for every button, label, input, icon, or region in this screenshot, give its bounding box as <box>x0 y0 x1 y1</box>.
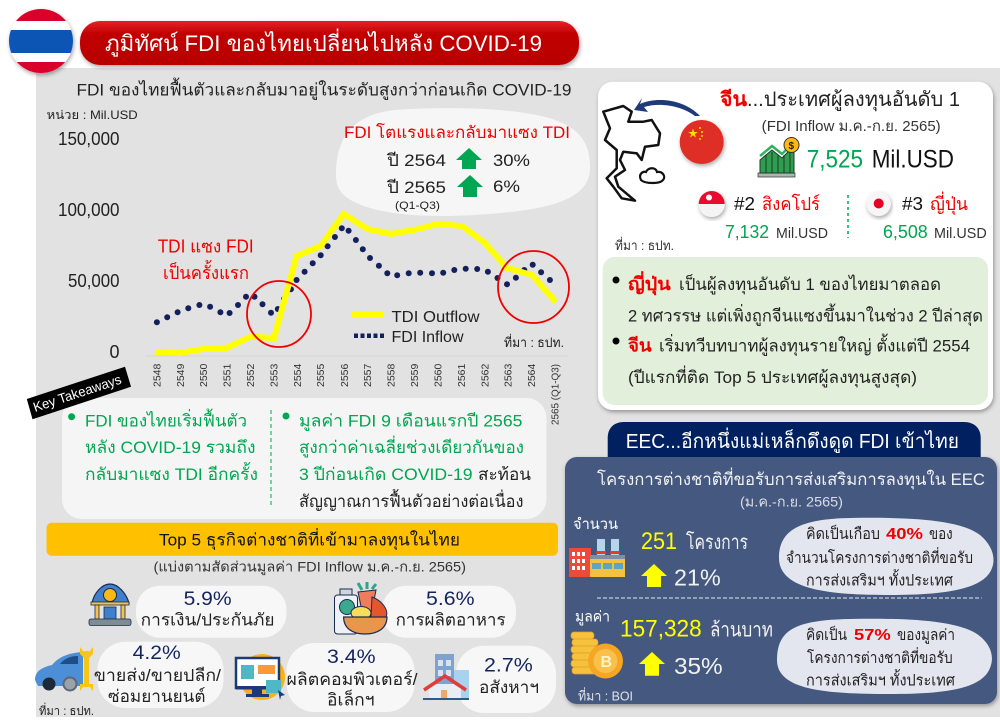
panel: key takeaways: สัญญาณการฟื้นตัวอย่างต่อเนื่อง <box>299 489 524 511</box>
icon: China flag <box>680 120 724 164</box>
panel: EEC projects <box>565 457 997 704</box>
panel: China top investor: จีน <box>720 88 747 111</box>
line chart: TDI outflow and FDI inflow: 2564 <box>526 363 538 387</box>
callout: TDI overtakes FDI: เป็นครั้งแรก <box>163 260 249 283</box>
text block: Japan and China notes: ญี่ปุ่น <box>628 271 671 296</box>
icon: food <box>334 582 387 634</box>
callout: share of value: การส่งเสริมฯ ทั้งประเทศ <box>806 669 955 690</box>
arrow: value up <box>639 652 665 676</box>
subheading: top 5 businesses: (แบ่งตามสัดส่วนมูลค่า FDI Inflow ม.ค.-ก.ย. 2565) <box>154 559 466 576</box>
panel: EEC projects: ล้านบาท <box>710 620 773 642</box>
panel: China top investor: Mil.USD <box>776 225 828 242</box>
card: real estate share <box>456 646 556 713</box>
arrow: China to Thailand <box>634 98 700 116</box>
icon: car and wrench <box>35 647 93 691</box>
panel: China top investor: 7,132 <box>725 222 769 242</box>
line chart: TDI outflow and FDI inflow: 2549 <box>175 363 187 387</box>
panel: key takeaways: FDI ของไทยเริ่มฟื้นตัว <box>85 409 247 431</box>
icon: real estate <box>423 654 469 700</box>
panel: China top investor: ...ประเทศผู้ลงทุนอันดับ 1 <box>747 89 960 112</box>
line chart: TDI outflow and FDI inflow: หน่วย : Mil.USD <box>47 108 138 122</box>
panel: key takeaways: กลับมาแซง TDI อีกครั้ง <box>85 462 258 484</box>
line chart: TDI outflow and FDI inflow: 2554 <box>292 363 304 387</box>
card: real estate share: อสังหาฯ <box>479 678 539 697</box>
callout: TDI overtakes FDI <box>158 237 254 283</box>
panel: EEC projects: โครงการต่างชาติที่ขอรับการส่งเสริมการลงทุนใน EEC <box>597 467 985 490</box>
text block: Japan and China notes: 2 ทศวรรษ แต่เพิ่งถูกจีนแซงขึ้นมาในช่วง 2 ปีล่าสุด <box>628 304 983 327</box>
callout: share of value: โครงการต่างชาติที่ขอรับ <box>807 647 953 667</box>
callout: FDI growth: 6% <box>493 177 520 196</box>
chart legend <box>351 309 480 346</box>
panel: EEC projects: 157,328 <box>620 616 702 643</box>
arrow: projects up <box>641 564 667 587</box>
card: retail and auto repair share <box>94 642 224 708</box>
icon: bank <box>89 584 131 626</box>
icon: China flag: ★ <box>688 129 698 140</box>
icon: computer <box>236 654 285 700</box>
line chart: TDI outflow and FDI inflow: 2561 <box>456 363 468 387</box>
panel: key takeaways: 3 ปีก่อนเกิด COVID-19 <box>299 465 473 484</box>
line chart: TDI outflow and FDI inflow: 0 <box>109 342 120 362</box>
line chart: TDI outflow and FDI inflow: 2565 (Q1-Q3) <box>550 364 562 425</box>
line chart: TDI outflow and FDI inflow: 2558 <box>386 363 398 387</box>
heading: top 5 businesses <box>46 523 558 556</box>
card: finance share: 5.9% <box>184 589 232 610</box>
panel: key takeaways: หลัง COVID-19 รวมถึง <box>85 438 256 457</box>
card: finance share <box>136 586 286 638</box>
panel: key takeaways: มูลค่า FDI 9 เดือนแรกปี 2565 <box>299 412 522 432</box>
panel: China top investor: ญี่ปุ่น <box>930 191 968 215</box>
panel: EEC projects: 21% <box>674 565 721 591</box>
line chart: TDI outflow and FDI inflow: 150,000 <box>58 129 120 149</box>
panel: key takeaways: สูงกว่าค่าเฉลี่ยช่วงเดียวกันของ <box>299 435 524 458</box>
heading tab: EEC: EEC...อีกหนึ่งแม่เหล็กดึงดูด FDI เข้าไทย <box>626 427 959 454</box>
card: food production share: 5.6% <box>426 589 475 610</box>
line chart: TDI outflow and FDI inflow: 2555 <box>315 363 327 387</box>
card: computer and electronics share: ผลิตคอมพิวเตอร์/ <box>286 670 418 689</box>
panel: China top investor: #3 <box>902 194 923 214</box>
icon: Singapore flag <box>698 191 725 217</box>
callout: share of projects: ของ <box>929 526 953 543</box>
callout: share of value: คิดเป็น <box>806 625 847 644</box>
card: finance share: การเงิน/ประกันภัย <box>141 611 274 630</box>
title: ภูมิทัศน์ FDI ของไทยเปลี่ยนไปหลัง COVID-19 <box>105 28 542 57</box>
line chart: TDI outflow and FDI inflow: 2553 <box>268 363 280 387</box>
panel: EEC projects: จำนวน <box>573 516 618 533</box>
panel: EEC projects: 251 <box>641 528 677 555</box>
card: food production share <box>382 586 516 638</box>
panel: EEC projects: (ม.ค.-ก.ย. 2565) <box>740 494 843 510</box>
callout: share of value: 57% <box>854 627 891 644</box>
source note: top 5: ที่มา : ธปท. <box>39 702 94 718</box>
icon: Japan flag <box>867 192 891 216</box>
card: real estate share: 2.7% <box>484 656 533 677</box>
icon: Thailand map <box>603 106 664 201</box>
icon: factory <box>569 539 625 577</box>
heading: top 5 businesses: Top 5 ธุรกิจต่างชาติที่เข้ามาลงทุนในไทย <box>159 528 460 551</box>
panel: China top investor: 6,508 <box>883 222 928 242</box>
callout: FDI growth: 30% <box>493 151 530 170</box>
text block: Japan and China notes: เริ่มทวีบทบาทผู้ลงทุนรายใหญ่ ตั้งแต่ปี 2554 <box>659 334 970 357</box>
line chart: TDI outflow and FDI inflow: 2552 <box>245 363 257 387</box>
line chart: TDI outflow and FDI inflow: 50,000 <box>68 271 120 291</box>
chart heading: FDI ของไทยฟื้นตัวและกลับมาอยู่ในระดับสูงกว่าก่อนเกิด COVID-19 <box>76 78 572 100</box>
icon: coins <box>571 632 623 678</box>
card: computer and electronics share: 3.4% <box>327 647 376 668</box>
line chart: TDI outflow and FDI inflow: 2551 <box>222 363 234 387</box>
line chart: TDI outflow and FDI inflow: 2556 <box>339 363 351 387</box>
panel: EEC projects: มูลค่า <box>575 609 610 626</box>
panel: China top investor: 7,525 <box>807 145 863 173</box>
callout: share of projects <box>779 518 994 595</box>
line chart: TDI outflow and FDI inflow: 2559 <box>409 363 421 387</box>
callout: FDI growth: FDI โตแรงและกลับมาแซง TDI <box>344 123 570 142</box>
callout: share of projects: คิดเป็นเกือบ <box>806 524 880 543</box>
panel: China top investor: Mil.USD <box>934 225 987 242</box>
callout: FDI growth <box>336 108 590 216</box>
chart legend: TDI Outflow <box>392 309 480 326</box>
text block: Japan and China notes <box>603 257 988 405</box>
line chart: TDI outflow and FDI inflow: 2557 <box>362 363 374 387</box>
panel: China top investor: สิงคโปร์ <box>762 193 820 214</box>
card: food production share: การผลิตอาหาร <box>396 611 506 630</box>
panel: EEC projects: 35% <box>674 653 723 679</box>
card: computer and electronics share: อิเล็กฯ <box>327 689 374 710</box>
panel: China top investor: #2 <box>734 194 755 214</box>
panel: China top investor <box>598 82 993 410</box>
card: computer and electronics share <box>286 643 418 712</box>
panel: EEC projects: โครงการ <box>686 531 748 554</box>
chart legend: FDI Inflow <box>392 329 464 346</box>
source note: chart: ที่มา : ธปท. <box>504 334 564 350</box>
icon: growth chart <box>758 138 799 177</box>
icon: growth chart: $ <box>788 141 794 152</box>
card: retail and auto repair share: ซ่อมยานยนต์ <box>108 687 206 706</box>
callout: FDI growth: (Q1-Q3) <box>395 200 440 212</box>
text block: Japan and China notes: เป็นผู้ลงทุนอันดับ 1 ของไทยมาตลอด <box>679 273 941 295</box>
panel: EEC projects: ที่มา : BOI <box>578 688 633 704</box>
card: retail and auto repair share: 4.2% <box>133 643 181 664</box>
callout: share of projects: การส่งเสริมฯ ทั้งประเทศ <box>806 569 953 590</box>
icon: coins: B <box>600 654 612 671</box>
line chart: TDI outflow and FDI inflow: 2560 <box>432 363 444 387</box>
card: retail and auto repair share: ขายส่ง/ขายปลีก/ <box>94 666 221 685</box>
panel: China top investor: Mil.USD <box>872 145 954 173</box>
icon: Thai flag <box>9 9 73 74</box>
heading tab: EEC <box>608 422 981 460</box>
line chart: TDI outflow and FDI inflow: 2548 <box>152 363 164 387</box>
callout: share of projects: 40% <box>886 526 923 543</box>
panel: China top investor: (FDI Inflow ม.ค.-ก.ย. 2565) <box>762 119 941 135</box>
callout: FDI growth: ปี 2565 <box>386 178 446 197</box>
callout: share of projects: จำนวนโครงการต่างชาติที่ขอรับ <box>786 547 973 567</box>
line chart: TDI outflow and FDI inflow: 2562 <box>480 363 492 387</box>
text block: Japan and China notes: จีน <box>628 336 652 356</box>
line chart: TDI outflow and FDI inflow: 2550 <box>198 363 210 387</box>
line chart: TDI outflow and FDI inflow: 2563 <box>502 363 514 387</box>
key takeaways label: Key Takeaways <box>31 372 124 415</box>
callout: TDI overtakes FDI: TDI แซง FDI <box>158 237 254 257</box>
panel: key takeaways: สะท้อน <box>478 465 531 484</box>
title <box>80 21 579 65</box>
line chart: TDI outflow and FDI inflow <box>47 108 569 425</box>
panel: key takeaways <box>62 398 546 519</box>
line chart: TDI outflow and FDI inflow: 100,000 <box>58 200 120 220</box>
callout: share of value: ของมูลค่า <box>897 627 955 645</box>
callout: FDI growth: ปี 2564 <box>386 151 446 170</box>
text block: Japan and China notes: (ปีแรกที่ติด Top 5 ประเทศผู้ลงทุนสูงสุด) <box>628 365 917 388</box>
panel: China top investor: ที่มา : ธปท. <box>615 237 674 253</box>
callout: share of value <box>777 619 992 694</box>
